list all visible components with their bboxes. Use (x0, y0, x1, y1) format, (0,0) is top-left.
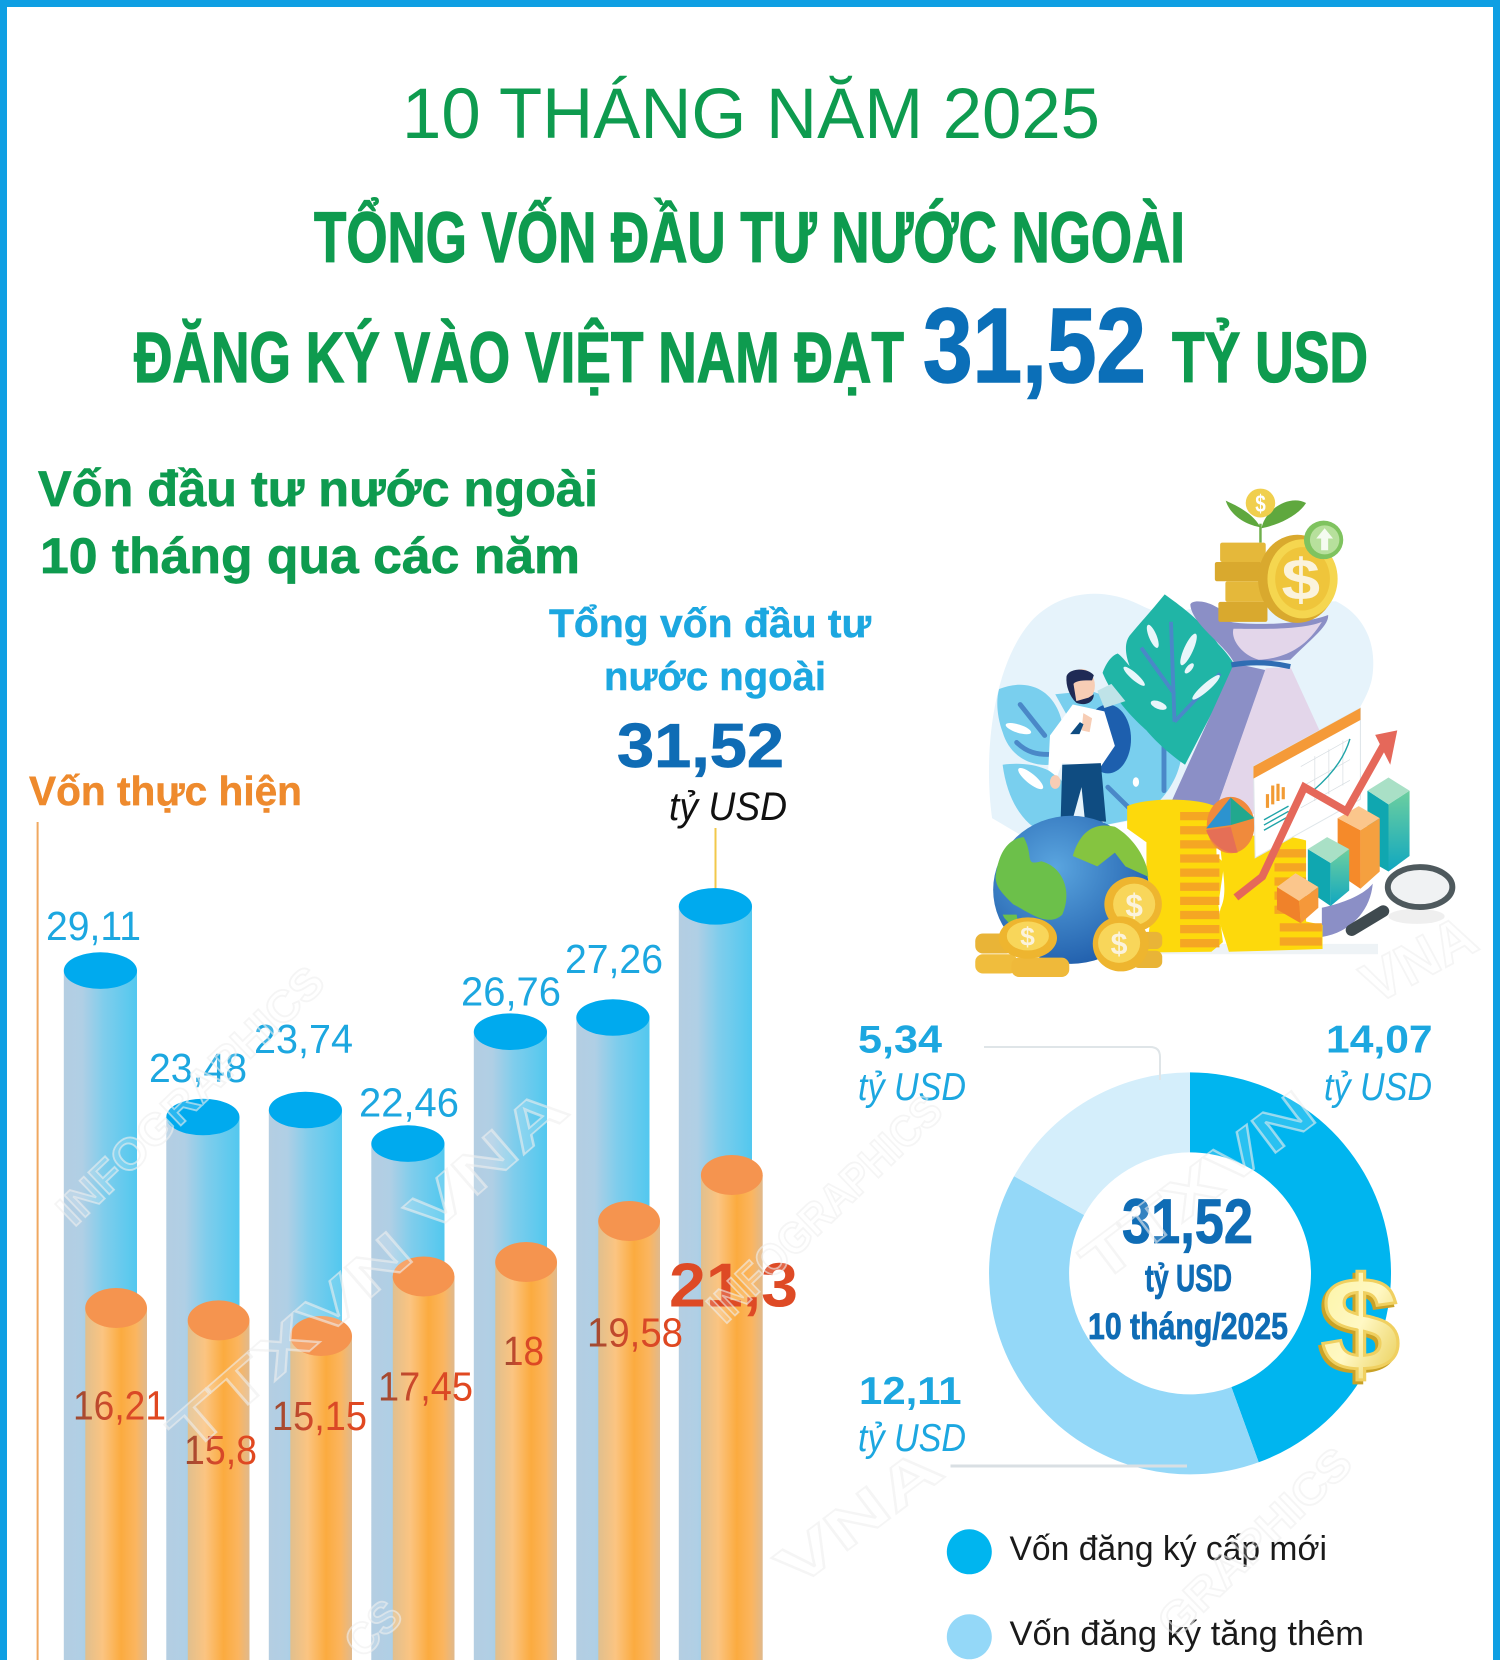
donut chart (858, 1019, 1433, 1474)
orange value labels: 15,15 (272, 1393, 367, 1439)
title: TỶ USD (1172, 319, 1368, 398)
man figure (1048, 669, 1131, 825)
globe (993, 816, 1149, 964)
front coins: $ (1111, 926, 1128, 961)
top coins with sprout: $ (1255, 491, 1266, 518)
bar chart (29, 602, 871, 1660)
blue value labels: 23,48 (149, 1045, 247, 1091)
label: 14,07: 14,07 (1326, 1019, 1433, 1062)
title: TỔNG VỐN ĐẦU TƯ NƯỚC NGOÀI (314, 198, 1185, 278)
orange value labels: 16,21 (73, 1382, 166, 1428)
donut centre text (1088, 1187, 1288, 1347)
blue value labels: 27,26 (565, 936, 663, 982)
segment: new registered 14,07 (1190, 1072, 1391, 1462)
donut centre text: 10 tháng/2025 (1088, 1306, 1288, 1347)
watermarks: TTXVN (156, 1219, 425, 1465)
label: 14,07: tỷ USD (1324, 1066, 1432, 1109)
leader line: 12,11 (950, 1464, 1187, 1468)
background blob (989, 594, 1373, 839)
title: 10 THÁNG NĂM 2025 (402, 75, 1100, 154)
legend: Vốn đăng ký tăng thêm (1010, 1615, 1364, 1653)
segment: added capital 12,11 (989, 1176, 1259, 1474)
icon: gold dollar: $ (1321, 1251, 1400, 1399)
watermarks: TTXVN (1069, 1078, 1327, 1295)
callout: total 31,52: Tổng vốn đầu tư (549, 602, 871, 646)
blue value labels: 22,46 (359, 1080, 459, 1126)
donut centre text: tỷ USD (1145, 1258, 1232, 1300)
pie chart (1206, 797, 1254, 853)
coin stacks (1127, 800, 1323, 952)
light blue leaves (997, 685, 1182, 834)
chart heading (38, 461, 598, 584)
legend (947, 1529, 1364, 1659)
isometric bars (1277, 778, 1410, 923)
blue value labels: 23,74 (254, 1016, 353, 1062)
callout: total 31,52: nước ngoài (604, 655, 826, 699)
label: 5,34: tỷ USD (858, 1066, 966, 1109)
chart heading: Vốn đầu tư nước ngoài (38, 461, 598, 517)
watermarks: VNA (394, 1074, 580, 1248)
label: 5,34: 5,34 (858, 1019, 942, 1062)
front coins: $ (1020, 922, 1035, 952)
watermarks: VNA (764, 1434, 955, 1600)
title (134, 75, 1368, 405)
title: ĐĂNG KÝ VÀO VIỆT NAM ĐẠT (134, 318, 904, 398)
dashboard window (1253, 708, 1360, 858)
axis label: Vốn thực hiện: Vốn thực hiện (29, 768, 302, 814)
orange value labels: 21,3 (669, 1252, 798, 1320)
callout: total 31,52: tỷ USD (669, 785, 787, 829)
teal leaf (1103, 594, 1236, 765)
front coins: $ (1125, 887, 1143, 923)
top coins with sprout (1215, 489, 1343, 623)
legend: Vốn đăng ký cấp mới (1010, 1530, 1327, 1568)
blue bars: total registered capital (64, 888, 752, 1660)
magnifier (1352, 867, 1452, 930)
donut centre text: 31,52 (1122, 1187, 1253, 1257)
orange value labels: 17,45 (378, 1364, 473, 1410)
money sack (1172, 601, 1373, 937)
callout: total 31,52 (549, 602, 871, 888)
orange value labels: 15,8 (184, 1427, 257, 1473)
watermarks: INFOGRAPHICS (47, 957, 334, 1235)
watermarks (47, 903, 1487, 1660)
orange value labels: 18 (503, 1328, 544, 1374)
chart heading: 10 tháng qua các năm (40, 528, 580, 584)
illustration: investment money bag, globe, coins, charts (975, 489, 1452, 977)
label: 14,07 (1324, 1019, 1433, 1109)
orange bars: disbursed capital (85, 1155, 763, 1660)
blue value labels (46, 903, 663, 1126)
callout: total 31,52: 31,52 (617, 712, 784, 781)
blue value labels: 29,11 (46, 903, 141, 949)
red growth arrow (1236, 730, 1397, 897)
ground shadow (1160, 944, 1378, 954)
top coins with sprout: $ (1282, 547, 1320, 612)
leader line: 5,34 (984, 1047, 1160, 1080)
title: 31,52 (923, 287, 1146, 405)
blue value labels: 26,76 (461, 969, 561, 1015)
orange value labels: 19,58 (587, 1310, 683, 1356)
label: 12,11: 12,11 (859, 1370, 962, 1413)
label: 12,11 (858, 1370, 966, 1460)
watermarks: GRAPHICS (1148, 1438, 1362, 1647)
watermarks: VNA (1351, 903, 1487, 1016)
segment: 5,34 (1014, 1072, 1190, 1215)
label: 5,34 (858, 1019, 966, 1109)
label: 12,11: tỷ USD (858, 1417, 966, 1460)
orange value labels (73, 1252, 798, 1473)
watermarks: INFOGRAPHICS (698, 1086, 952, 1332)
front coins (975, 877, 1162, 977)
